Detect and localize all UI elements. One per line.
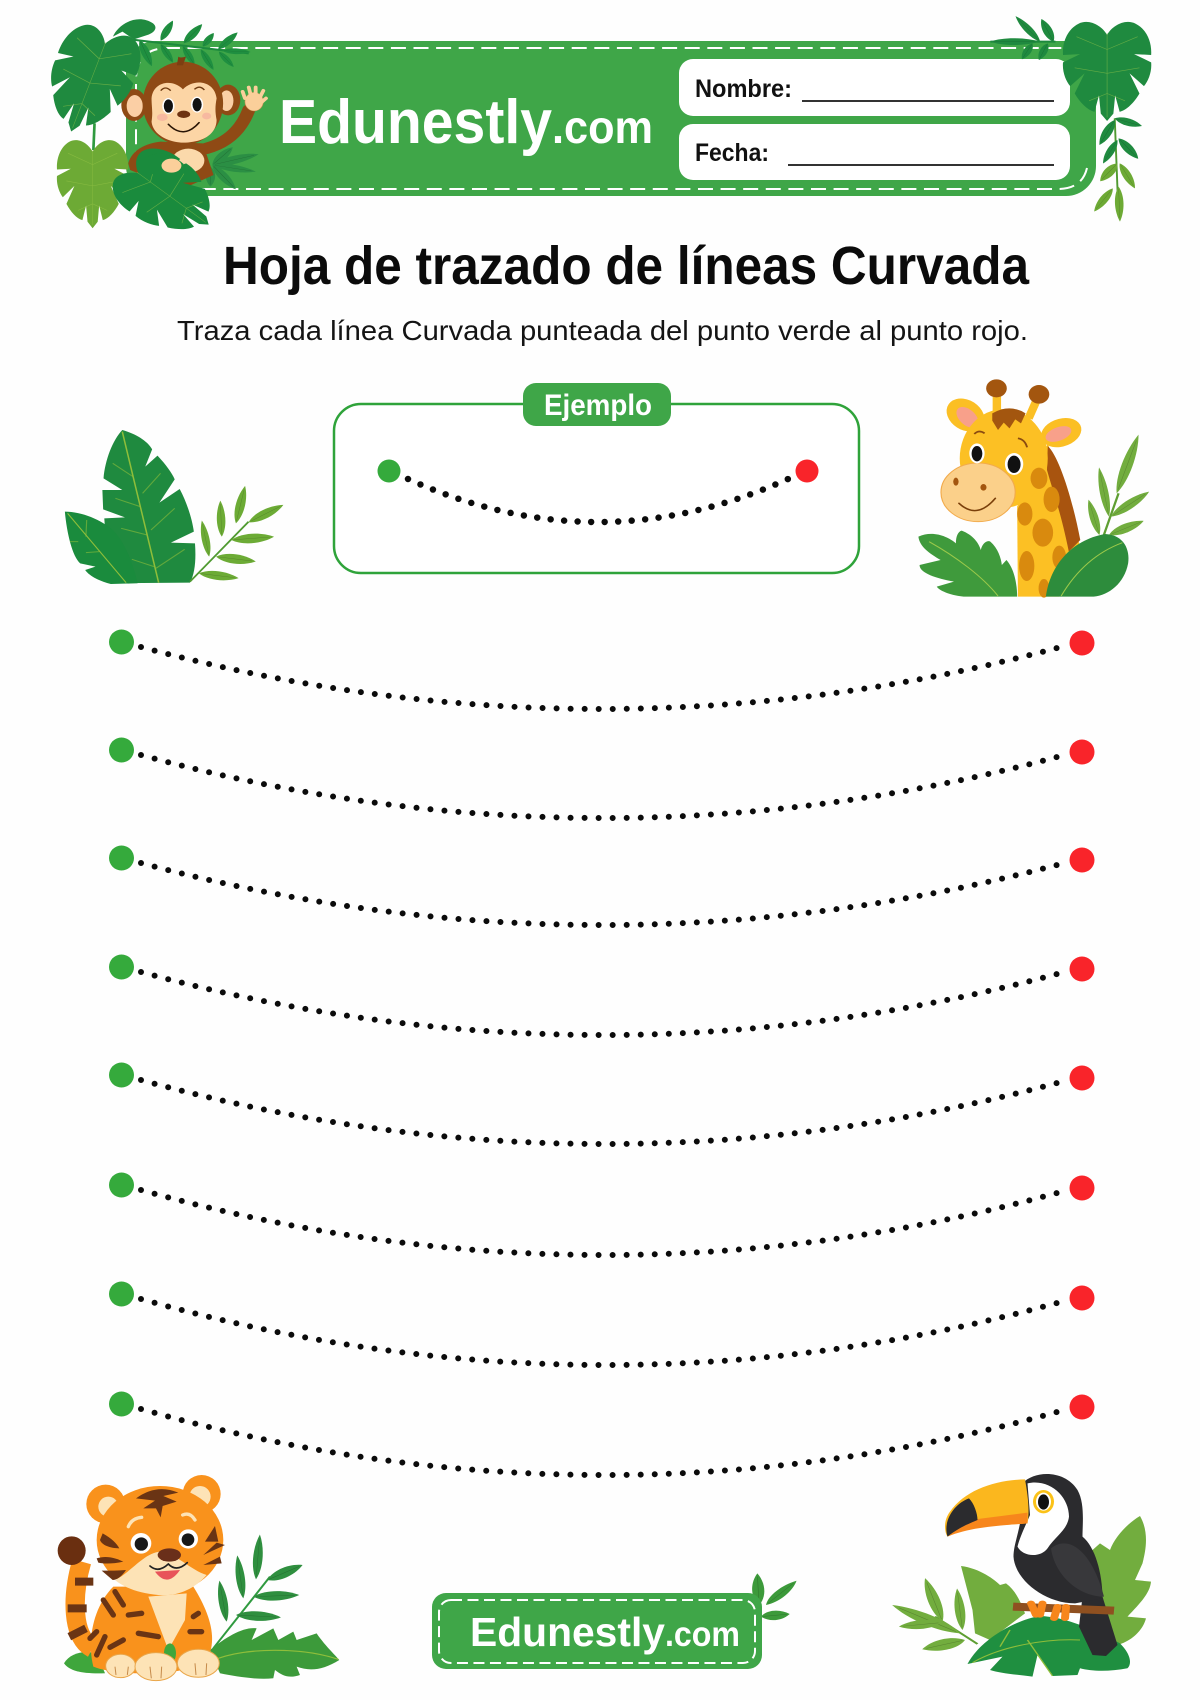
ears (939, 392, 1087, 453)
vine stem (93, 123, 95, 150)
footer brand name: .com (665, 1615, 740, 1654)
illustration: left leaf plant (65, 430, 286, 584)
illustration: tiger (58, 1475, 339, 1681)
illustration: monkey with leaves (32, 19, 266, 251)
row 2 (109, 738, 1094, 818)
body (90, 1587, 219, 1681)
beak (945, 1479, 1029, 1537)
brand name: Edunestly (279, 88, 552, 157)
example dotted curve (408, 479, 788, 522)
row 7 (109, 1282, 1094, 1365)
footer logo (432, 1573, 801, 1669)
example tag: Ejemplo (544, 389, 652, 422)
tracing rows (109, 630, 1094, 1475)
right leaf and sprig (210, 1534, 339, 1679)
branch (990, 14, 1058, 61)
footer brand name: Edunestly (470, 1609, 665, 1655)
right leaf (1046, 534, 1128, 597)
vine (1115, 118, 1119, 217)
top branch (130, 19, 251, 71)
header banner (126, 41, 1096, 196)
big leaf (102, 430, 195, 583)
tail (1079, 1597, 1118, 1656)
small leaf (65, 512, 138, 584)
title: Hoja de trazado de líneas Curvada (223, 236, 1030, 296)
row 8 (109, 1392, 1094, 1475)
row 5 (109, 1062, 1094, 1144)
example start dot (378, 460, 400, 482)
row 4 (109, 954, 1094, 1035)
example tag (523, 383, 671, 426)
illustration: toucan (888, 1474, 1151, 1677)
white bib (1018, 1482, 1069, 1555)
top small leaf lobe (113, 19, 155, 39)
illustration: giraffe (918, 379, 1152, 598)
sprig (190, 485, 286, 583)
head (86, 1475, 225, 1595)
leaf over body (140, 154, 184, 180)
vine leaflets (1091, 115, 1143, 222)
example end dot (796, 460, 818, 482)
illustration: top right leaves (990, 14, 1151, 222)
neck (1017, 443, 1080, 598)
left ground leaf (64, 1652, 105, 1673)
eye (1033, 1490, 1054, 1513)
panel: example (334, 383, 859, 573)
left leaf (918, 531, 1017, 597)
name field: Nombre: (695, 75, 792, 103)
row 1 (109, 630, 1094, 709)
body (1014, 1474, 1102, 1603)
branch (1013, 1607, 1114, 1611)
leaves behind (888, 1516, 1151, 1654)
sprig (1084, 433, 1152, 539)
row 3 (109, 846, 1094, 925)
row 6 (109, 1172, 1094, 1255)
name field (679, 59, 1070, 116)
tail (58, 1536, 93, 1648)
feet (1031, 1603, 1066, 1618)
monkey small hand (161, 159, 181, 173)
small leaf by monkey (206, 144, 260, 192)
monstera leaf light (57, 140, 128, 228)
date field (679, 124, 1070, 180)
subtitle: Traza cada línea Curvada punteada del punto verde al punto rojo. (177, 315, 1028, 346)
monstera leaf top (32, 19, 149, 143)
date field: Fecha: (695, 139, 769, 167)
big leaf (968, 1616, 1130, 1677)
head (941, 408, 1048, 522)
brand name: .com (552, 101, 653, 153)
monkey (121, 57, 266, 190)
footer leaves (751, 1573, 801, 1621)
monstera leaf (1063, 22, 1151, 121)
wing (1051, 1543, 1104, 1597)
horns (986, 379, 1049, 418)
monstera leaf lower (103, 139, 234, 251)
